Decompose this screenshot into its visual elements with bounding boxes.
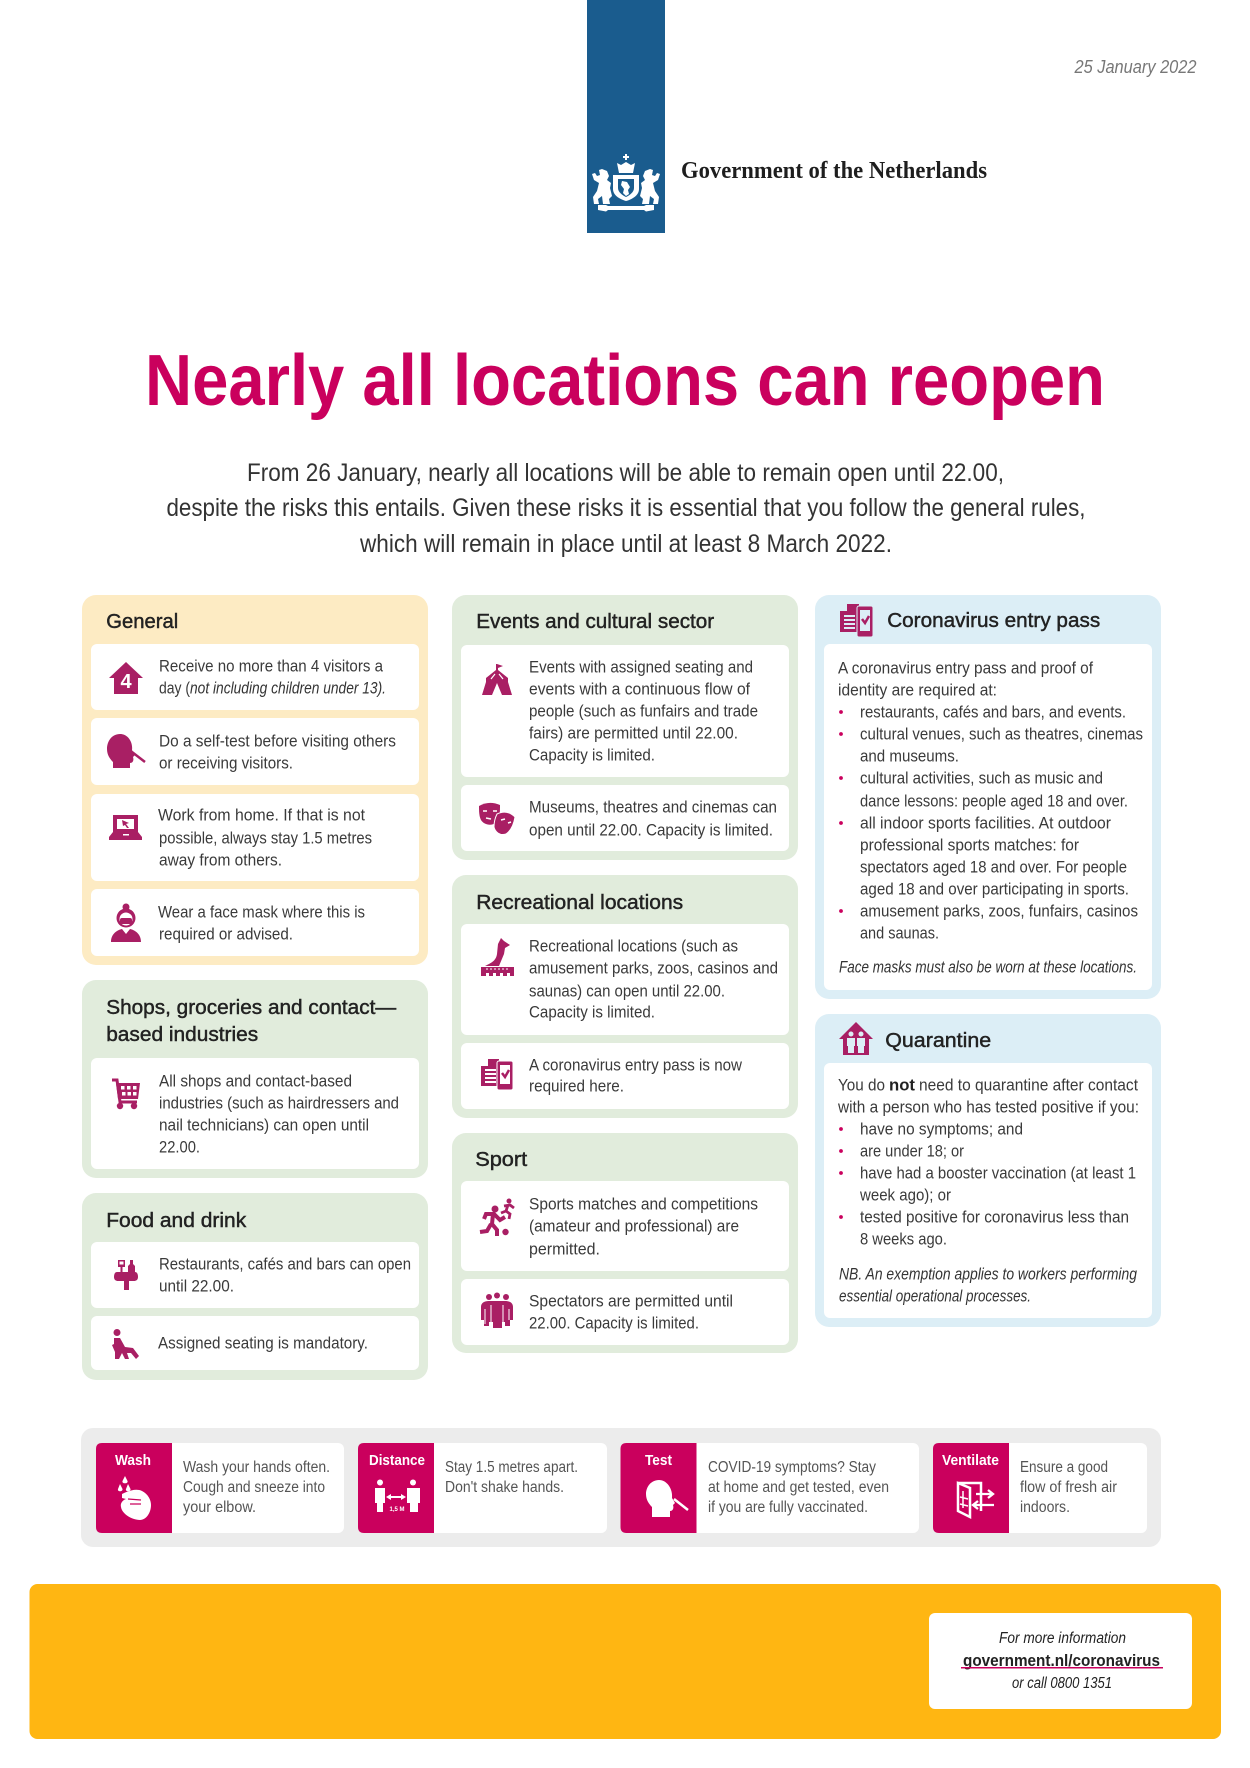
text: seating: Assigned seating is mandatory. bbox=[158, 1334, 368, 1353]
text: Test: COVID-19 symptoms? Stay bbox=[708, 1459, 876, 1476]
text: shops: All shops and contact-based bbox=[159, 1072, 352, 1091]
card: work from home bbox=[91, 794, 419, 881]
note: exemption bbox=[839, 1264, 1137, 1306]
callout: more information: or call 0800 1351 bbox=[1012, 1675, 1112, 1692]
note: exemption: NB. An exemption applies to workers performing bbox=[839, 1264, 1137, 1284]
text: recreational bbox=[529, 937, 778, 1022]
heading: Events: Events and cultural sector bbox=[476, 610, 714, 633]
card: face mask bbox=[91, 889, 419, 956]
intro text: From 26 January, nearly all locations will be able to remain open until 22.00, bbox=[247, 459, 1004, 487]
heading: Shops: Shops, groceries and contact— bbox=[106, 996, 397, 1019]
bullet list: locations: and saunas. bbox=[860, 924, 939, 943]
text: Wash bbox=[183, 1459, 330, 1516]
text: Ventilate: indoors. bbox=[1020, 1499, 1070, 1516]
text: events: Events with assigned seating and bbox=[529, 658, 753, 677]
text: shops: 22.00. bbox=[159, 1138, 200, 1157]
text: events: Capacity is limited. bbox=[529, 746, 655, 765]
text: events: people (such as funfairs and trade bbox=[529, 702, 758, 721]
panel: Quarantine bbox=[815, 1014, 1161, 1327]
text: work from home: possible, always stay 1.5 metres bbox=[159, 829, 372, 848]
text: events bbox=[529, 658, 758, 765]
bullet list: locations: cultural activities, such as music and bbox=[860, 769, 1103, 788]
bullet list: locations: professional sports matches: for bbox=[860, 836, 1079, 855]
rule: Wash bbox=[96, 1443, 344, 1533]
bullet list: locations bbox=[839, 703, 1143, 943]
text: museums bbox=[529, 798, 777, 840]
bullet list: conditions: 8 weeks ago. bbox=[860, 1230, 947, 1249]
text: face mask: required or advised. bbox=[159, 925, 293, 944]
heading: Shops bbox=[106, 996, 397, 1046]
icon: drinks on table bbox=[114, 1260, 138, 1290]
label: Test: Test bbox=[645, 1453, 672, 1469]
card: visitors bbox=[91, 644, 419, 710]
logo ribbon bbox=[587, 0, 665, 233]
text: Test: if you are fully vaccinated. bbox=[708, 1499, 868, 1516]
icon: theatre masks bbox=[479, 803, 515, 835]
text: visitors: not including children under 13). bbox=[190, 678, 386, 698]
date: 25 January 2022 bbox=[1074, 57, 1196, 77]
card: spectators bbox=[461, 1279, 789, 1345]
text: Wash: your elbow. bbox=[183, 1499, 256, 1516]
icon: coat of arms bbox=[592, 154, 660, 212]
text: recreational: saunas) can open until 22.00. bbox=[529, 982, 725, 1001]
heading: Shops: based industries bbox=[106, 1023, 258, 1046]
text: recreational: amusement parks, zoos, casinos and bbox=[529, 959, 778, 978]
heading: General: General bbox=[106, 610, 178, 633]
bullet list: locations: amusement parks, zoos, funfairs, casinos bbox=[860, 902, 1138, 921]
heading: Quarantine: Quarantine bbox=[885, 1029, 991, 1052]
text: museums: open until 22.00. Capacity is limited. bbox=[529, 821, 773, 840]
text: recreational: Capacity is limited. bbox=[529, 1003, 655, 1022]
text: visitors: day ( bbox=[159, 679, 190, 698]
icon: seated person bbox=[112, 1329, 139, 1359]
icon: house with number 4 bbox=[109, 662, 143, 694]
note: face masks: Face masks must also be worn at these locations. bbox=[839, 958, 1137, 976]
text: self-test bbox=[159, 732, 396, 773]
panel: General bbox=[82, 595, 428, 965]
text: Distance bbox=[445, 1459, 578, 1496]
text: Ventilate: flow of fresh air bbox=[1020, 1479, 1117, 1496]
icon: two people at distance bbox=[375, 1480, 420, 1513]
intro text bbox=[166, 459, 1086, 558]
bullet list: locations: restaurants, cafés and bars, and events. bbox=[860, 703, 1126, 722]
text: events: events with a continuous flow of bbox=[529, 680, 750, 699]
card: recreational bbox=[461, 924, 789, 1035]
icon: group of spectators bbox=[481, 1292, 513, 1328]
text: museums: Museums, theatres and cinemas can bbox=[529, 798, 777, 817]
panel: Sport bbox=[452, 1133, 798, 1353]
panel: Events and cultural sector bbox=[452, 595, 798, 860]
text: intro: need to quarantine after contact bbox=[919, 1076, 1138, 1095]
text: shops: nail technicians) can open until bbox=[159, 1116, 369, 1135]
text: entry pass: required here. bbox=[529, 1077, 624, 1096]
callout: more information bbox=[929, 1613, 1192, 1709]
card: events bbox=[461, 645, 789, 777]
text: intro bbox=[838, 659, 1093, 700]
heading: Recreational locations: Recreational locations bbox=[476, 891, 683, 914]
rule: Distance bbox=[358, 1443, 607, 1533]
card: museums bbox=[461, 785, 789, 851]
icon: head with swab bbox=[646, 1480, 688, 1517]
text: matches: (amateur and professional) are bbox=[529, 1217, 739, 1236]
heading: Sport: Sport bbox=[475, 1148, 528, 1171]
bullet list: locations: dance lessons: people aged 18 and over. bbox=[860, 792, 1128, 811]
bullet list: locations: all indoor sports facilities. At outdoor bbox=[860, 814, 1111, 833]
icon: circus tent bbox=[482, 664, 512, 695]
heading: Coronavirus entry pass: Coronavirus entry pass bbox=[887, 609, 1100, 632]
intro text: despite the risks this entails. Given these risks it is essential that you follow the general rules, bbox=[166, 494, 1086, 522]
text: restaurants: until 22.00. bbox=[159, 1277, 234, 1296]
text: Test bbox=[708, 1459, 889, 1516]
text: Wash: Cough and sneeze into bbox=[183, 1479, 325, 1496]
icon: football players bbox=[480, 1198, 514, 1236]
icon: house with number 4: 4 bbox=[120, 671, 132, 693]
panel: general rules strip bbox=[81, 1428, 1161, 1547]
card: shops bbox=[91, 1058, 419, 1169]
text: spectators bbox=[529, 1292, 733, 1333]
text: Wash: Wash your hands often. bbox=[183, 1459, 330, 1476]
card: matches bbox=[461, 1181, 789, 1271]
bullet list: locations: aged 18 and over participating in sports. bbox=[860, 880, 1129, 899]
icon: shopping cart bbox=[112, 1080, 140, 1109]
icon: washing hands bbox=[118, 1476, 151, 1520]
text: face mask: Wear a face mask where this is bbox=[158, 903, 365, 922]
text: matches bbox=[529, 1195, 758, 1259]
text: matches: Sports matches and competitions bbox=[529, 1195, 758, 1214]
card: entry pass details bbox=[824, 644, 1152, 990]
text: shops bbox=[159, 1072, 399, 1157]
callout: more information: government.nl/coronavirus bbox=[963, 1651, 1160, 1670]
bullet list: conditions: tested positive for coronavirus less than bbox=[860, 1208, 1129, 1227]
card: restaurants bbox=[91, 1242, 419, 1308]
icon: entry pass bbox=[481, 1059, 513, 1090]
panel: Food and drink bbox=[82, 1193, 428, 1380]
text: intro: not bbox=[889, 1076, 915, 1095]
text: intro: You do bbox=[838, 1076, 885, 1095]
card: entry pass required bbox=[461, 1043, 789, 1109]
icon: laptop bbox=[109, 815, 142, 840]
bullet list: locations: cultural venues, such as theatres, cinemas bbox=[860, 725, 1143, 744]
text: recreational: Recreational locations (such as bbox=[529, 937, 738, 956]
text: Ventilate bbox=[1020, 1459, 1117, 1516]
text: face mask bbox=[158, 903, 365, 944]
panel: Coronavirus entry pass bbox=[815, 595, 1161, 999]
bullet list: conditions: are under 18; or bbox=[860, 1142, 964, 1161]
text: visitors bbox=[159, 657, 386, 698]
callout: more information: For more information bbox=[999, 1630, 1126, 1647]
card: quarantine details bbox=[824, 1063, 1152, 1318]
text: visitors: Receive no more than 4 visitors a bbox=[159, 657, 383, 676]
panel: Shops, groceries and contact-based industries bbox=[82, 980, 428, 1178]
text: shops: industries (such as hairdressers and bbox=[159, 1094, 399, 1113]
text: matches: permitted. bbox=[529, 1240, 600, 1259]
logo: Government of the Netherlands bbox=[587, 0, 987, 233]
text: work from home: Work from home. If that is not bbox=[158, 806, 365, 825]
text: intro: A coronavirus entry pass and proof of bbox=[838, 659, 1093, 678]
text: restaurants bbox=[159, 1255, 411, 1296]
text: work from home: away from others. bbox=[159, 851, 282, 870]
text: intro: with a person who has tested positive if you: bbox=[837, 1098, 1139, 1117]
label: Distance: Distance bbox=[369, 1453, 425, 1469]
icon: entry pass bbox=[840, 604, 873, 637]
note: exemption: essential operational processes. bbox=[839, 1286, 1031, 1306]
bullet list: conditions: have no symptoms; and bbox=[860, 1120, 1023, 1139]
text: Test: at home and get tested, even bbox=[708, 1479, 889, 1496]
icon: open door with airflow bbox=[958, 1483, 994, 1517]
wordmark: Government of the Netherlands bbox=[681, 158, 987, 184]
intro text: which will remain in place until at least 8 March 2022. bbox=[359, 530, 892, 558]
icon: person with face mask bbox=[111, 904, 141, 942]
text: entry pass: A coronavirus entry pass is now bbox=[529, 1056, 743, 1075]
text: restaurants: Restaurants, cafés and bars can open bbox=[159, 1255, 411, 1274]
icon: house with two people bbox=[839, 1022, 873, 1055]
text: self-test: or receiving visitors. bbox=[159, 754, 293, 773]
text: intro bbox=[837, 1076, 1139, 1117]
icon: head with swab bbox=[107, 734, 145, 768]
label: Ventilate: Ventilate bbox=[942, 1453, 999, 1469]
text: work from home bbox=[158, 806, 372, 870]
title: Nearly all locations can reopen bbox=[145, 341, 1105, 421]
icon: giraffe at a zoo bbox=[481, 938, 514, 976]
icon: two people at distance: 1,5 M bbox=[389, 1507, 405, 1513]
text: intro: identity are required at: bbox=[838, 681, 997, 700]
bullet list: conditions: week ago); or bbox=[859, 1186, 951, 1205]
text: self-test: Do a self-test before visiting others bbox=[159, 732, 396, 751]
text: spectators: Spectators are permitted until bbox=[529, 1292, 733, 1311]
text: Distance: Stay 1.5 metres apart. bbox=[445, 1459, 578, 1476]
bullet list: conditions bbox=[839, 1120, 1136, 1249]
text: spectators: 22.00. Capacity is limited. bbox=[529, 1314, 699, 1333]
bullet list: conditions: have had a booster vaccination (at least 1 bbox=[860, 1164, 1136, 1183]
card: self-test bbox=[91, 718, 419, 785]
footer band bbox=[30, 1584, 1221, 1739]
heading: Food and drink: Food and drink bbox=[106, 1209, 247, 1232]
label: Wash: Wash bbox=[115, 1453, 151, 1469]
text: events: fairs) are permitted until 22.00. bbox=[529, 724, 738, 743]
rule: Ventilate bbox=[933, 1443, 1147, 1533]
text: entry pass bbox=[529, 1056, 743, 1096]
text: Ventilate: Ensure a good bbox=[1020, 1459, 1108, 1476]
panel: Recreational locations bbox=[452, 875, 798, 1118]
rule: Test bbox=[620, 1443, 919, 1533]
card: seating bbox=[91, 1316, 419, 1370]
text: Distance: Don't shake hands. bbox=[445, 1479, 564, 1496]
bullet list: locations: and museums. bbox=[860, 747, 959, 766]
bullet list: locations: spectators aged 18 and over. For people bbox=[860, 858, 1127, 877]
